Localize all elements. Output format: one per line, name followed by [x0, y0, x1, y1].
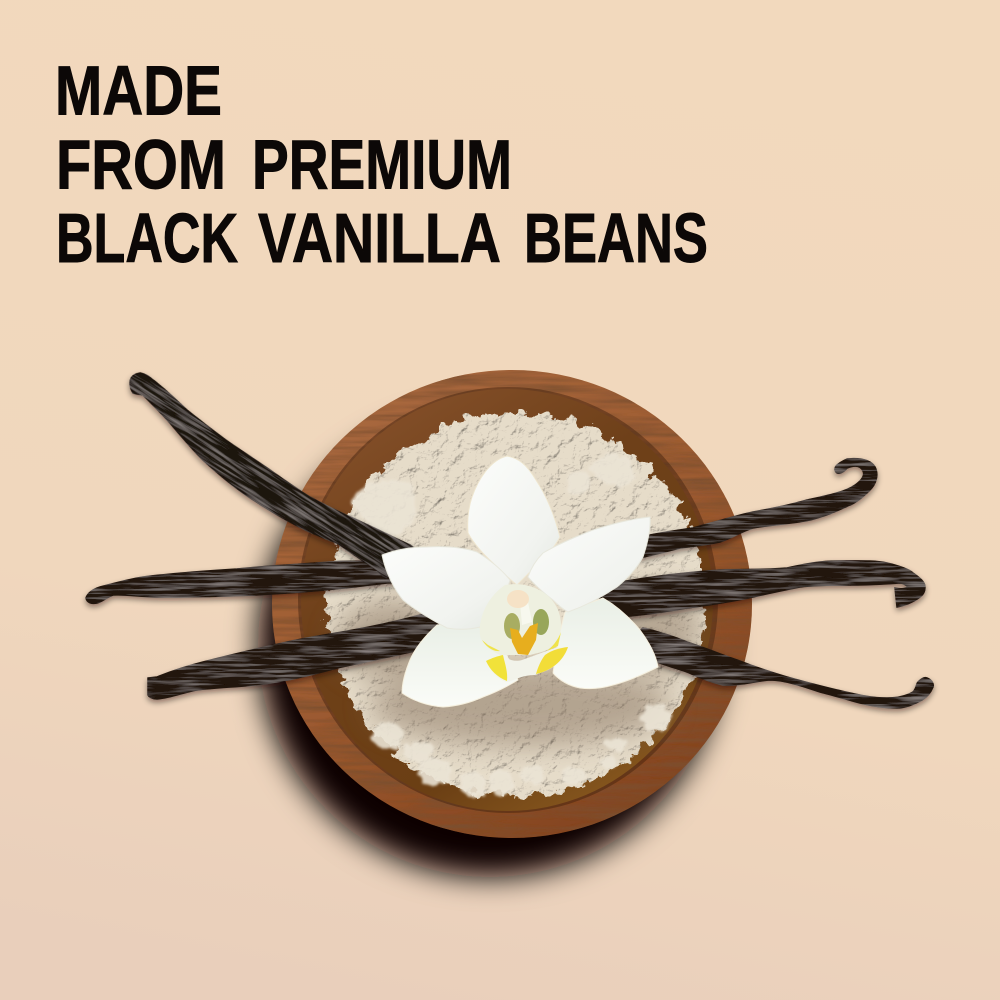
powder lumps: [352, 453, 671, 798]
bowl shadow: [258, 413, 722, 877]
title: MADE: [55, 52, 222, 130]
title: BLACK: [56, 199, 238, 277]
wooden bowl: [272, 370, 752, 838]
title: BEANS: [524, 199, 708, 277]
vanilla beans: [38, 238, 933, 713]
petal: top: [468, 456, 560, 585]
petal: lower left: [402, 622, 518, 707]
flour powder: [326, 413, 706, 798]
bean: upper right: [620, 459, 877, 560]
petal: lower right: [553, 598, 658, 689]
title: FROM: [56, 126, 226, 204]
petal: left: [382, 547, 510, 629]
petal: right: [528, 517, 650, 612]
flower centre: [480, 584, 568, 682]
title: PREMIUM: [252, 126, 512, 204]
bean: long diagonal: [38, 238, 522, 713]
bean: lower left: [148, 610, 450, 699]
bean: middle left: [86, 561, 420, 603]
bean: lower right: [630, 628, 933, 708]
title: VANILLA: [258, 199, 501, 277]
title: [55, 52, 708, 277]
bean: middle right: [600, 561, 925, 618]
orchid flower: [382, 456, 658, 707]
